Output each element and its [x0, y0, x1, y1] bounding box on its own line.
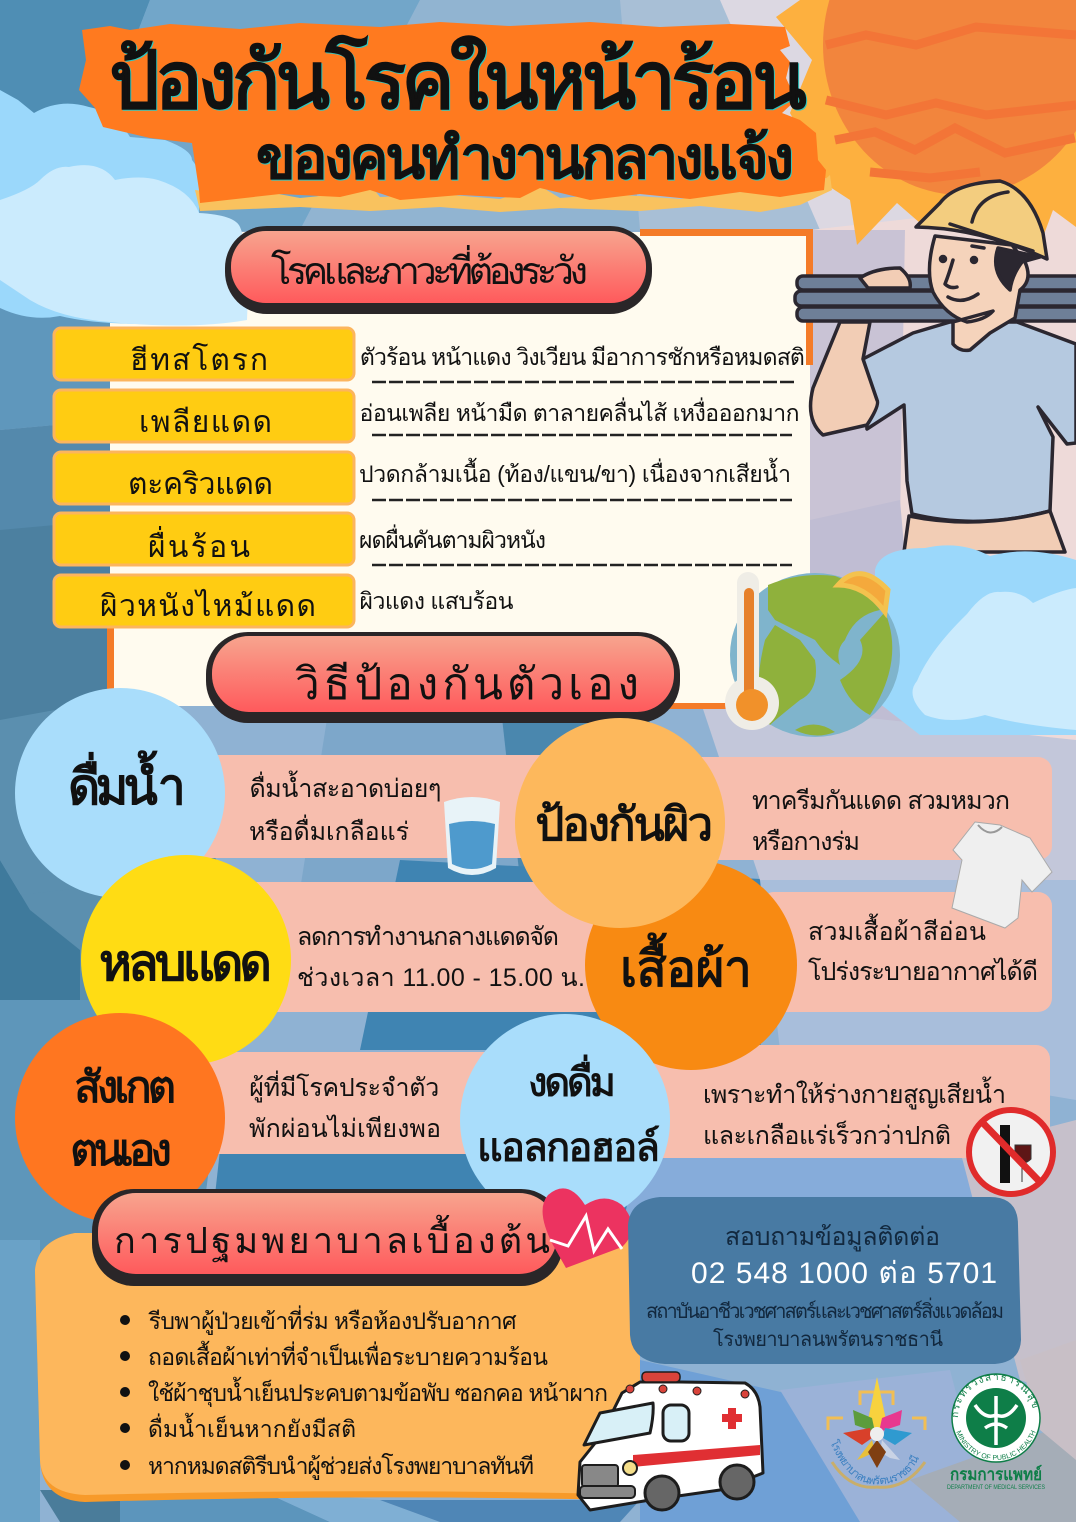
panel: contact [628, 1197, 1021, 1364]
neck and face [929, 236, 1028, 350]
circle: self observe: ตนเอง [70, 1126, 172, 1175]
logo: Ministry of Public Health: กรมการแพทย์ [950, 1464, 1042, 1484]
circle: drink water [15, 688, 225, 898]
logo: Ministry of Public Health: DEPARTMENT OF MEDICAL SERVICES [947, 1485, 1045, 1491]
pill heading: first aid: การปฐมพยาบาลเบื้องต้น [114, 1214, 550, 1263]
facial features [945, 246, 984, 300]
torso [863, 322, 1076, 521]
pill heading: prevention [206, 632, 680, 723]
title line 1: ป้องกันโรคในหน้าร้อน [109, 35, 807, 125]
title line 2: ของคนทำงานกลางแจ้ง [256, 126, 794, 191]
panel: diseases background [107, 229, 813, 709]
logo: Nopparat hospital: โรงพยาบาลนพรัตนราชธานี [832, 1438, 919, 1484]
bar: avoid sun [240, 882, 620, 1012]
hair [996, 248, 1040, 290]
helmet [916, 181, 1047, 259]
first aid list [120, 1305, 608, 1480]
pill heading: diseases: โรคและภาวะที่ต้องระวัง [271, 245, 588, 293]
panel: contact: สถาบันอาชีวเวชศาสตร์และเวชศาสตร์สิ่งแวดล้อม [646, 1297, 1004, 1323]
first aid list: ดื่มน้ำเย็นหากยังมีสติ [148, 1413, 356, 1442]
circle: self observe [15, 1013, 225, 1223]
pill heading: first aid [92, 1189, 563, 1286]
label: heat rash [54, 513, 354, 565]
label: heat exhaustion [54, 390, 354, 442]
circle: no alcohol [460, 1014, 670, 1226]
circle: drink water: ดื่มน้ำ [68, 751, 186, 815]
icon: ambulance [578, 1372, 763, 1510]
rows: disease table [54, 328, 805, 627]
panel: contact: สอบถามข้อมูลติดต่อ [725, 1223, 940, 1252]
panel: first aid [35, 1233, 640, 1502]
hand [860, 268, 910, 288]
description 4: ผดผื่นคันตามผิวหนัง [359, 524, 546, 553]
circle: self observe: สังเกต [74, 1063, 176, 1112]
description 1: ตัวร้อน หน้าแดง วิงเวียน มีอาการชักหรือหมดสติ [360, 344, 805, 370]
bar: clothing: สวมเสื้อผ้าสีอ่อน [808, 913, 986, 946]
first aid list: หากหมดสติรีบนำผู้ช่วยส่งโรงพยาบาลทันที [148, 1453, 534, 1480]
label: sunburn [54, 575, 354, 627]
label: sunburn: ผิวหนังไหม้แดด [100, 588, 316, 623]
circle: no alcohol: งดดื่ม [528, 1055, 616, 1105]
pill heading: diseases [225, 226, 652, 314]
logo: Ministry of Public Health: MINISTRY OF PUBLIC HEALTH [956, 1430, 1036, 1460]
label: heatstroke [54, 328, 354, 380]
panel: contact: โรงพยาบาลนพรัตนราชธานี [713, 1328, 943, 1351]
icon: glass of water [444, 797, 500, 875]
icon: sun [776, 0, 1076, 245]
label: heat cramps [54, 452, 354, 504]
bar: no alcohol: และเกลือแร่เร็วกว่าปกติ [703, 1120, 951, 1150]
pill heading: prevention: วิธีป้องกันตัวเอง [295, 660, 639, 709]
bar: no alcohol: เพราะทำให้ร่างกายสูญเสียน้ำ [703, 1076, 1006, 1110]
icon: earth with thermometer [725, 572, 900, 737]
bar: self observe: ผู้ที่มีโรคประจำตัว [249, 1070, 439, 1103]
bar: drink water [180, 755, 540, 858]
bar: protect skin [660, 757, 1052, 860]
description 2: อ่อนเพลีย หน้ามืด ตาลายคลื่นไส้ เหงื่อออกมาก [360, 397, 800, 426]
first aid list: ถอดเสื้อผ้าเท่าที่จำเป็นเพื่อระบายความร้อน [148, 1341, 548, 1370]
label: heat exhaustion: เพลียแดด [139, 406, 272, 439]
icon: t-shirt [952, 822, 1052, 928]
first aid list: รีบพาผู้ป่วยเข้าที่ร่ม หรือห้องปรับอากาศ [148, 1305, 517, 1335]
icon: no alcohol sign [969, 1110, 1053, 1194]
circle: clothing [585, 860, 797, 1070]
bar: self observe: พักผ่อนไม่เพียงพอ [249, 1114, 441, 1143]
circle: clothing: เสื้อผ้า [620, 933, 752, 997]
icon: heart [543, 1188, 632, 1268]
bar: drink water: ดื่มน้ำสะอาดบ่อยๆ [249, 770, 441, 803]
first aid list: ใช้ผ้าชุบน้ำเย็นประคบตามข้อพับ ซอกคอ หน้าผาก [148, 1377, 608, 1407]
bar: no alcohol [640, 1045, 1050, 1158]
pipes [795, 276, 1076, 321]
icon: left clouds [0, 90, 248, 326]
logo: Ministry of Public Health: กระทรวงสาธารณสุข [952, 1374, 1038, 1418]
icon: construction worker [795, 181, 1076, 552]
bar: protect skin: ทาครีมกันแดด สวมหมวก [752, 787, 1010, 815]
bar: avoid sun: ช่วงเวลา 11.00 - 15.00 น. [297, 964, 585, 992]
logo: Nopparat hospital [826, 1377, 926, 1489]
panel: contact: 02 548 1000 ต่อ 5701 [691, 1257, 997, 1290]
waist [904, 511, 1065, 552]
bar: avoid sun: ลดการทำงานกลางแดดจัด [297, 923, 559, 951]
label: heat cramps: ตะคริวแดด [128, 468, 273, 501]
description 3: ปวดกล้ามเนื้อ (ท้อง/แขน/ขา) เนื่องจากเสียน้ำ [359, 458, 791, 487]
label: heat rash: ผื่นร้อน [148, 526, 250, 564]
title banner [79, 22, 832, 212]
bar: clothing: โปร่งระบายอากาศได้ดี [808, 957, 1038, 986]
bar: clothing [760, 892, 1052, 1012]
icon: right clouds [875, 545, 1076, 735]
bar: self observe [190, 1052, 490, 1154]
label: heatstroke: ฮีทสโตรก [130, 342, 268, 377]
bar: drink water: หรือดื่มเกลือแร่ [249, 814, 409, 846]
logo: Ministry of Public Health [947, 1373, 1045, 1491]
bar: protect skin: หรือกางร่ม [752, 828, 860, 856]
circle: no alcohol: แอลกอฮอล์ [477, 1125, 660, 1170]
description 5: ผิวแดง แสบร้อน [359, 588, 514, 614]
circle: avoid sun: หลบแดด [99, 935, 272, 991]
arm [811, 322, 878, 435]
circle: avoid sun [81, 855, 291, 1065]
circle: protect skin: ป้องกันผิว [535, 798, 713, 850]
circle: protect skin [515, 718, 725, 928]
